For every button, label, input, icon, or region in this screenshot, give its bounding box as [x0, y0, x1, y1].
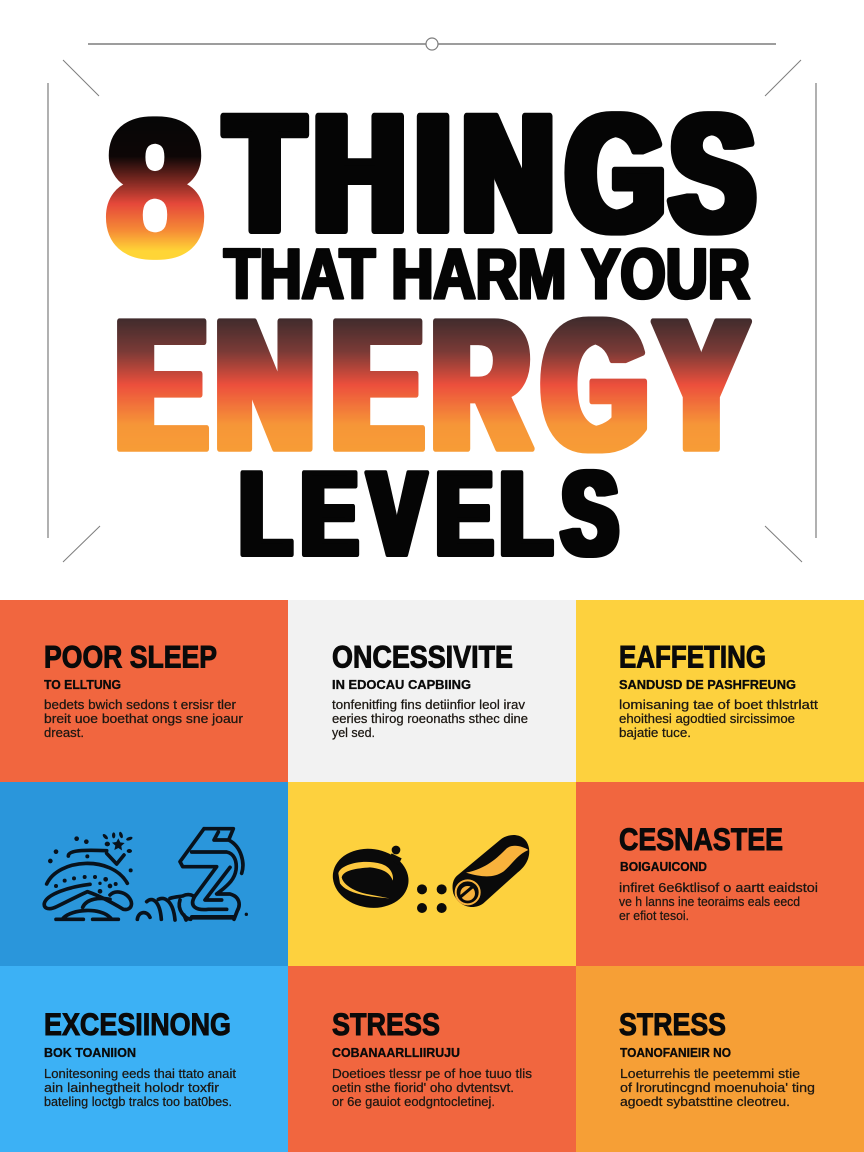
body text [619, 880, 818, 923]
panel: oncessivite [288, 600, 576, 782]
body text: infiret 6e6ktlisof o aartt eaidstoi [619, 880, 818, 895]
panel: stress orange [576, 966, 864, 1152]
panel: cesnastee [576, 782, 864, 966]
body text: of lrorutincgnd moenuhoia' ting [620, 1080, 815, 1095]
panel: food icon [288, 782, 576, 966]
heading: CESNASTEE [619, 821, 783, 857]
subheading: BOIGAUICOND [620, 859, 707, 874]
title word LEVELS: LEVELS [240, 447, 618, 580]
body text: Loeturrehis tle peetemmi stie [620, 1066, 800, 1081]
body text: bedets bwich sedons t ersisr tler [44, 697, 237, 712]
title line THAT HARM YOUR: THAT HARM YOUR [224, 236, 750, 314]
body text: er efiot tesoi. [619, 908, 689, 923]
heading: EXCESIINONG [44, 1006, 231, 1042]
body text: ain lainhegtheit holodr toxfir [44, 1080, 220, 1095]
subheading: BOK TOANIION [44, 1045, 136, 1060]
title word ENERGY: ENERGY [117, 281, 745, 488]
heading: STRESS [619, 1006, 726, 1042]
body text: eeries thirog roeonaths sthec dine [332, 711, 528, 726]
icon: fruit, dots and roll [329, 835, 529, 913]
panel: sleep icon [0, 782, 288, 966]
body text: breit uoe boethat ongs sne joaur [44, 711, 244, 726]
body text: Lonitesoning eeds thai ttato anait [44, 1066, 236, 1081]
body text [619, 697, 818, 740]
body text: dreast. [44, 725, 84, 740]
body text: lomisaning tae of boet thlstrlatt [619, 697, 818, 712]
heading: ONCESSIVITE [332, 638, 513, 674]
body text [332, 1066, 533, 1109]
title [107, 81, 755, 580]
icon: burger and sleeping z [44, 829, 248, 920]
body text: agoedt sybatsttine cleotreu. [620, 1094, 790, 1109]
body text: oetin sthe fiorid' oho dvtentsvt. [332, 1080, 514, 1095]
panel: excesiinong [0, 966, 288, 1152]
body text: tonfenitfing fins detiinfior leol irav [332, 697, 526, 712]
body text: bateling loctgb tralcs too bat0bes. [44, 1094, 232, 1109]
body text: bajatie tuce. [619, 725, 691, 740]
subheading: COBANAARLLIIRUJU [332, 1045, 460, 1060]
panel: eaffeting [576, 600, 864, 782]
heading: EAFFETING [619, 638, 766, 674]
body text [620, 1066, 815, 1109]
subheading: TO ELLTUNG [44, 677, 121, 692]
panel: stress [288, 966, 576, 1152]
body text: Doetioes tlessr pe of hoe tuuo tlis [332, 1066, 533, 1081]
top decorative rule with circle [48, 38, 816, 562]
body text: or 6e gauiot eodgntocletinej. [332, 1094, 495, 1109]
heading: STRESS [332, 1006, 440, 1042]
subheading: TOANOFANIEIR NO [620, 1045, 731, 1060]
body text: ehoithesi agodtied sircissimoe [619, 711, 795, 726]
body text: yel sed. [332, 725, 375, 740]
panel: poor sleep [0, 600, 288, 782]
subheading: SANDUSD DE PASHFREUNG [619, 677, 796, 692]
subheading: IN EDOCAU CAPBIING [332, 677, 471, 692]
heading: POOR SLEEP [44, 638, 217, 674]
title numeral 8: 8 [107, 82, 203, 294]
title word THINGS: THINGS [226, 81, 755, 266]
body text [44, 697, 244, 740]
body text: ve h lanns ine teoraims eals eecd [619, 894, 800, 909]
body text [44, 1066, 236, 1109]
body text [332, 697, 528, 740]
